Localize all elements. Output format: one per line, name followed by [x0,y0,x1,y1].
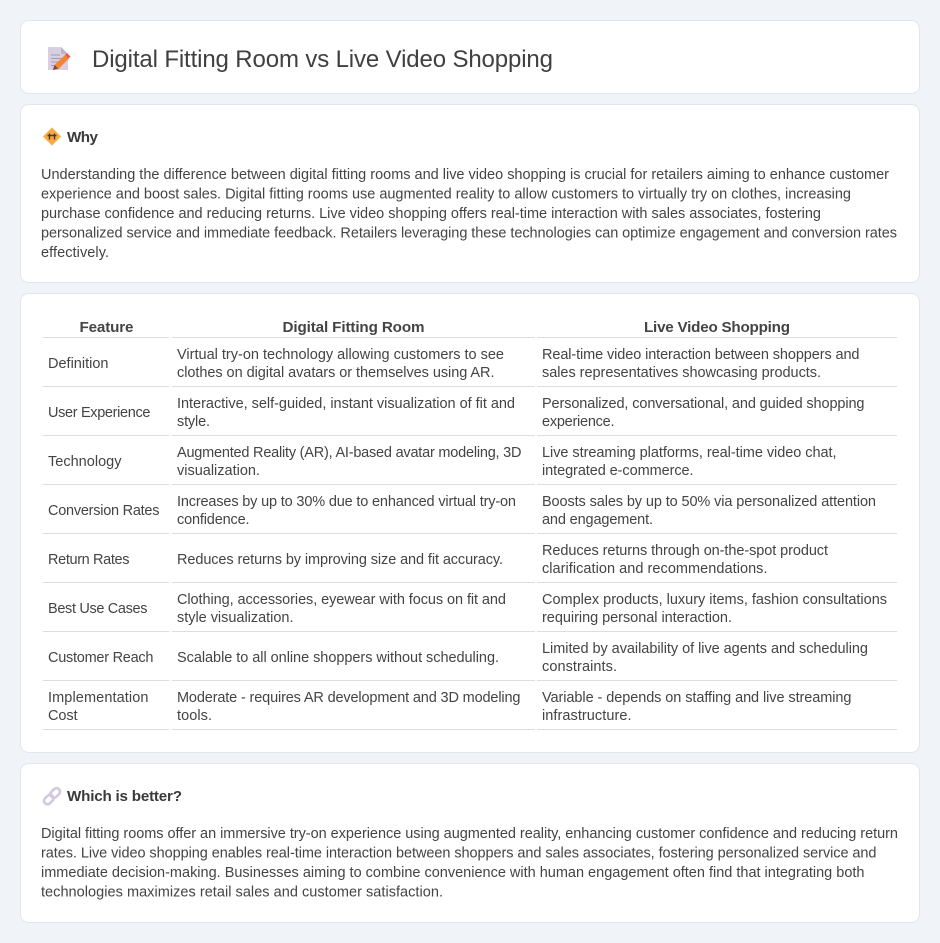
table header row: Feature [80,319,134,336]
row: return rates: Reduces returns by improving size and fit accuracy. [177,552,503,568]
row: customer reach: Scalable to all online shoppers without scheduling. [177,650,499,666]
row: conversion rates: confidence. [177,512,250,528]
row: conversion rates: Boosts sales by up to 50% via personalized attention [542,494,876,510]
row: best use cases: Best Use Cases [48,601,148,617]
row: definition: Virtual try-on technology allowing customers to see [177,347,504,363]
row: definition: clothes on digital avatars or themselves using AR. [177,365,494,381]
row: definition: Real-time video interaction between shoppers and [542,347,860,363]
row: return rates: Reduces returns through on-the-spot product [542,543,828,559]
panel: why [20,104,920,282]
row: implementation cost: Cost [48,708,78,724]
icon: chain link [43,787,61,806]
row: conversion rates: Increases by up to 30% due to enhanced virtual try-on [177,494,516,510]
icon: diamond sign [44,128,60,145]
text block: why paragraph: effectively. [41,245,109,261]
row: technology: visualization. [177,463,260,479]
row: implementation cost: Moderate - requires AR development and 3D modeling [177,690,520,706]
panel: comparison table [20,294,920,752]
row: return rates: Return Rates [48,552,130,568]
row: customer reach [48,641,868,675]
text block: why paragraph: Understanding the difference between digital fitting rooms and live video shopping is crucial for retailers aiming to enhance customer [41,167,889,183]
row: user experience: Personalized, conversational, and guided shopping [542,396,864,412]
panel: which is better [20,764,920,922]
row: user experience [48,396,864,430]
row: definition [48,347,860,381]
text block: which is better paragraph [41,826,898,900]
row: return rates: clarification and recommendations. [542,561,768,577]
text block: why paragraph: personalized service and immediate feedback. Retailers leveraging these technologies can optimize engagement and conversion rates [41,226,897,242]
text block: which is better paragraph: Digital fitting rooms offer an immersive try-on experience using augmented reality, enhancing customer confidence and reducing return [41,826,898,842]
row: best use cases: Clothing, accessories, eyewear with focus on fit and [177,592,506,608]
row: best use cases: requiring personal interaction. [542,610,732,626]
panel: title header [20,20,920,94]
text block: which is better paragraph: rates. Live video shopping enables real-time interaction between shoppers and sales associates, fostering personalized service and [41,846,876,862]
table header row: Live Video Shopping [644,319,790,336]
text block: why paragraph [41,167,897,261]
row: technology: integrated e-commerce. [542,463,694,479]
row: implementation cost: infrastructure. [542,708,632,724]
icon: document with pencil [48,47,70,70]
row: user experience: Interactive, self-guided, instant visualization of fit and [177,396,515,412]
row: conversion rates: Conversion Rates [48,503,160,519]
row: best use cases [48,592,887,626]
row: implementation cost: Variable - depends on staffing and live streaming [542,690,852,706]
row: best use cases: style visualization. [177,610,294,626]
row: user experience: style. [177,414,210,430]
title: Digital Fitting Room vs Live Video Shopping [92,46,553,73]
row: conversion rates: and engagement. [542,512,653,528]
row: conversion rates [48,494,876,528]
row: implementation cost: tools. [177,708,212,724]
row: technology [48,445,836,479]
row: definition: Definition [48,356,108,372]
row: implementation cost: Implementation [48,690,148,706]
heading: why: Why [67,129,99,146]
row: return rates [48,543,828,577]
row: user experience: experience. [542,414,614,430]
row: customer reach: constraints. [542,659,617,675]
table header row [80,319,790,336]
row: definition: sales representatives showcasing products. [542,365,821,381]
row: customer reach: Customer Reach [48,650,154,666]
text block: which is better paragraph: technologies maximizes retail sales and customer satisfaction. [41,884,443,900]
row: technology: Augmented Reality (AR), AI-based avatar modeling, 3D [177,445,522,461]
row: user experience: User Experience [48,405,150,421]
row: customer reach: Limited by availability of live agents and scheduling [542,641,868,657]
text block: which is better paragraph: immediate decision-making. Businesses aiming to combine convenience with human engagement often find that integrating both [41,865,864,881]
text block: why paragraph: purchase confidence and reducing returns. Live video shopping offers real-time interaction with sales associates, fostering [41,206,821,222]
row: technology: Live streaming platforms, real-time video chat, [542,445,836,461]
row: best use cases: Complex products, luxury items, fashion consultations [542,592,887,608]
table header row: Digital Fitting Room [282,319,424,336]
heading: which is better: Which is better? [67,788,182,805]
row: implementation cost [48,690,852,724]
text block: why paragraph: experience and boost sales. Digital fitting rooms use augmented reality to allow customers to virtually try on clothes, increasing [41,186,851,202]
row: technology: Technology [48,454,122,470]
